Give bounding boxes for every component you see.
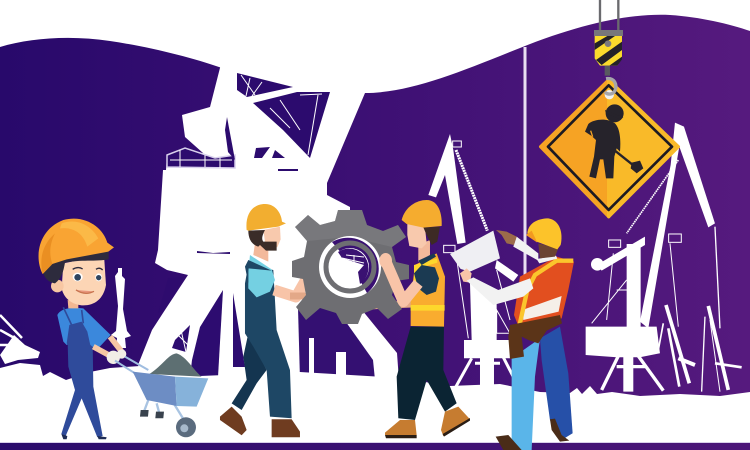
helmet xyxy=(527,218,562,249)
big white crane silhouette xyxy=(138,60,400,395)
face xyxy=(263,227,281,247)
back leg xyxy=(540,327,573,440)
boots xyxy=(61,434,107,439)
ear xyxy=(51,280,64,292)
plan paper xyxy=(450,231,500,272)
second arm behind gear xyxy=(290,296,412,306)
worker: man's arm xyxy=(274,262,316,297)
ground xyxy=(0,363,750,445)
sign board xyxy=(541,80,678,217)
helmet xyxy=(402,200,442,228)
helmet xyxy=(39,219,114,274)
pointing hand xyxy=(496,230,517,245)
vest yellow band xyxy=(519,261,573,326)
vest xyxy=(411,253,445,327)
hook block xyxy=(594,30,623,76)
hook ring xyxy=(605,79,616,99)
overall bib xyxy=(67,322,91,357)
hook and sign xyxy=(541,0,678,217)
reflective stripes xyxy=(411,258,445,311)
wheelbarrow xyxy=(115,353,208,437)
arm xyxy=(387,263,418,302)
worker: man with plan xyxy=(450,218,574,450)
hair xyxy=(423,227,440,245)
boots xyxy=(496,419,569,450)
bottom bar xyxy=(0,442,750,450)
boots xyxy=(385,407,470,436)
hair xyxy=(538,243,558,258)
holding hand xyxy=(460,268,472,283)
small crane silhouettes left xyxy=(0,268,131,364)
sign worker pictogram xyxy=(585,104,643,178)
eyes xyxy=(73,268,103,293)
sleeve xyxy=(248,255,275,297)
crane silhouettes right xyxy=(428,123,742,392)
legs xyxy=(61,342,103,437)
left leg xyxy=(232,333,267,410)
helmet xyxy=(246,204,286,231)
trousers xyxy=(397,327,457,420)
worker: man in orange vest xyxy=(379,200,470,438)
neck xyxy=(253,242,268,262)
front leg xyxy=(512,338,540,450)
forearms xyxy=(93,337,122,357)
shirt xyxy=(57,308,111,350)
sleeve xyxy=(414,265,439,295)
vest white band xyxy=(522,296,562,320)
raised sleeve xyxy=(513,237,538,261)
collar xyxy=(537,256,557,263)
cables xyxy=(600,0,618,31)
thin vertical pole xyxy=(524,47,526,287)
hair xyxy=(43,251,109,283)
vest xyxy=(514,257,574,330)
boots xyxy=(220,407,300,437)
face xyxy=(407,223,427,248)
tool belt xyxy=(508,315,562,359)
worker: man in overalls xyxy=(220,204,300,437)
hand xyxy=(303,246,323,268)
face xyxy=(62,255,106,305)
hair and beard xyxy=(248,230,277,251)
neck xyxy=(68,300,78,308)
white arm xyxy=(467,277,533,305)
worker: boy with wheelbarrow xyxy=(39,219,208,439)
right leg and bib xyxy=(245,265,292,418)
gear xyxy=(292,210,409,324)
neck xyxy=(418,240,430,262)
